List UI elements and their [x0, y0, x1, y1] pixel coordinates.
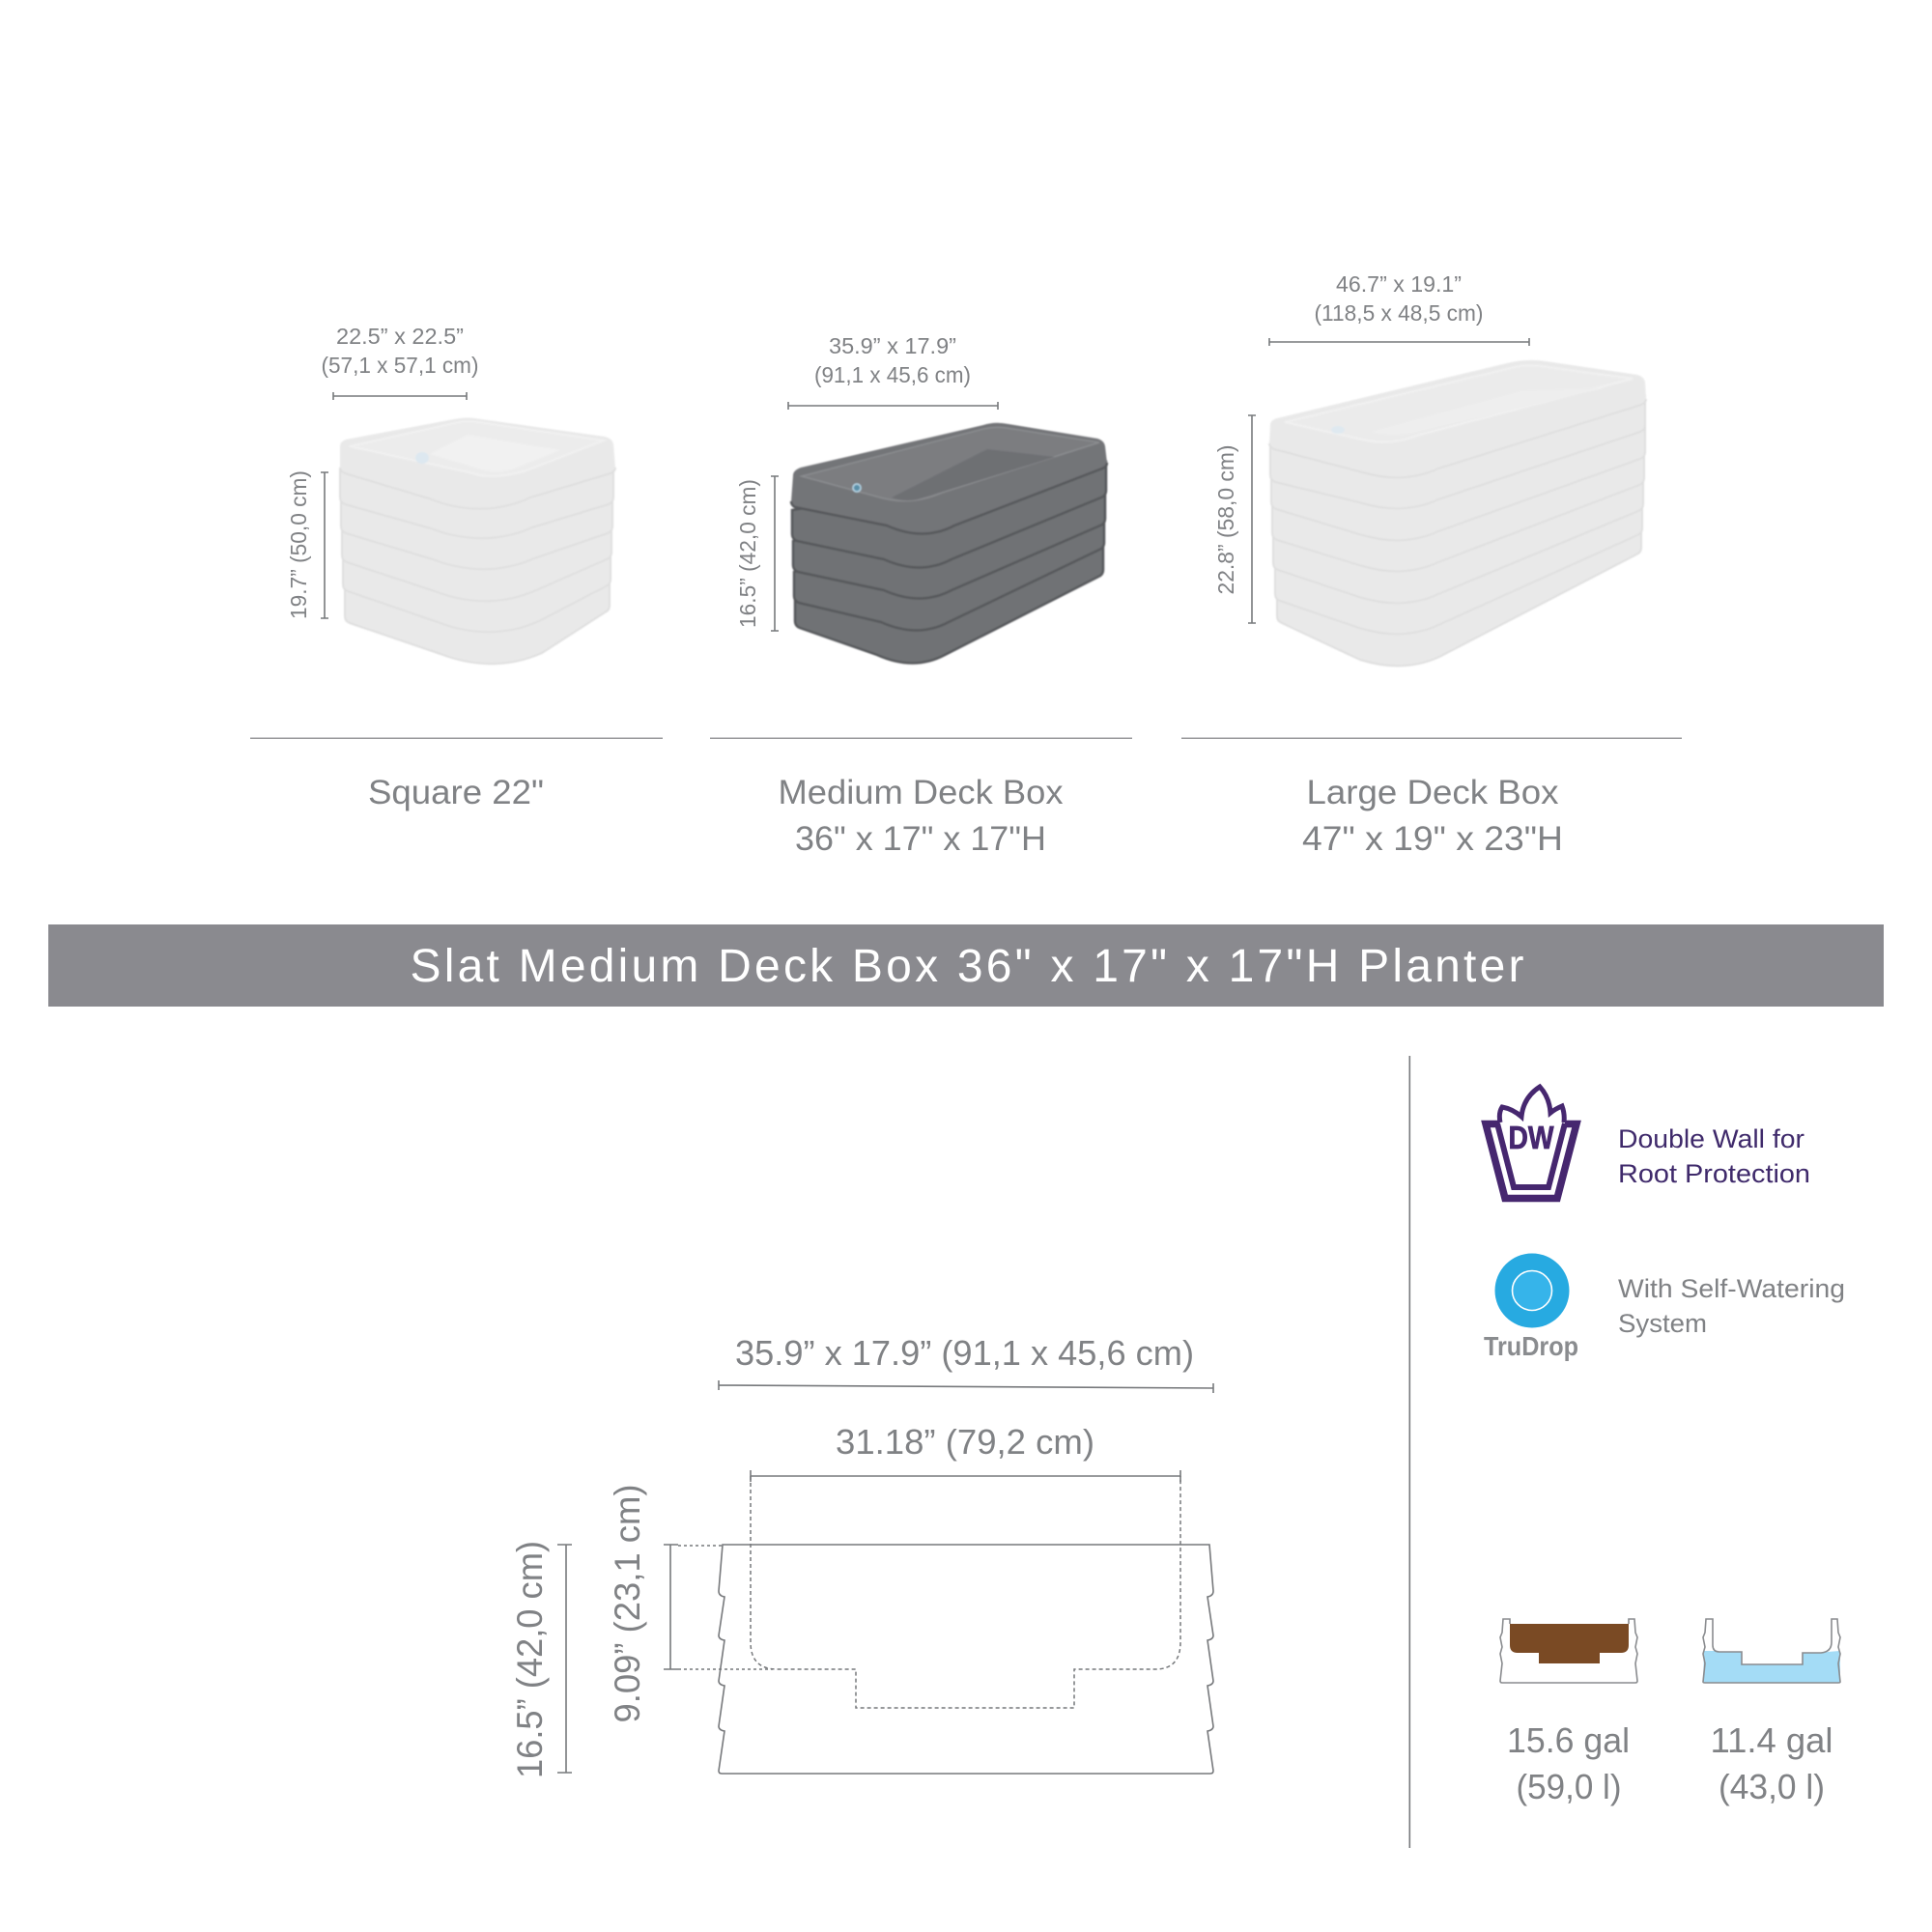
label: large deck box — [1302, 774, 1563, 858]
text: double wall for root protection — [1618, 1124, 1810, 1188]
height dimension: large — [1213, 415, 1256, 623]
text: soil gallons: 15.6 gal — [1507, 1720, 1630, 1760]
width dimension: medium: 35.9” x 17.9” — [829, 333, 956, 358]
panel: large deck box planter — [1181, 271, 1682, 858]
inner width dimension: 31.18” (79,2 cm) — [836, 1422, 1094, 1462]
width dimension: square: 22.5” x 22.5” — [336, 324, 464, 349]
divider: medium — [710, 738, 1132, 739]
vertical divider — [1408, 1056, 1410, 1848]
height dimension: square: 19.7” (50,0 cm) — [286, 470, 311, 619]
outer width dimension: 35.9” x 17.9” (91,1 x 45,6 cm) — [735, 1333, 1194, 1373]
total height dimension — [510, 1541, 572, 1778]
label: large deck box: 47" x 19" x 23"H — [1302, 820, 1563, 858]
width dimension: square — [321, 324, 479, 400]
feature: self-watering — [1484, 1254, 1845, 1361]
height dimension: medium — [735, 476, 779, 631]
text: soil gallons: (59,0 l) — [1517, 1767, 1621, 1806]
text: water gallons: (43,0 l) — [1719, 1767, 1825, 1806]
soil depth dimension: 9.09” (23,1 cm) — [608, 1484, 647, 1723]
text: soil gallons — [1507, 1720, 1630, 1806]
text: with self-watering system — [1618, 1274, 1845, 1338]
icon: TruDrop: TruDrop — [1484, 1331, 1578, 1361]
icon: TruDrop — [1484, 1254, 1578, 1361]
panel: square 22 planter — [250, 324, 663, 811]
label: medium deck box — [779, 774, 1064, 858]
width dimension: medium — [788, 333, 998, 410]
diagram: water fill — [1703, 1619, 1840, 1683]
height dimension: square — [286, 470, 328, 619]
divider: large — [1181, 738, 1682, 739]
total height dimension: 16.5” (42,0 cm) — [510, 1541, 550, 1778]
width dimension: large: (118,5 x 48,5 cm) — [1314, 300, 1484, 326]
panel: cross-section dimension drawing — [510, 1333, 1213, 1778]
width dimension: square: (57,1 x 57,1 cm) — [321, 353, 479, 378]
capacity: water volume — [1703, 1619, 1840, 1806]
text: water gallons — [1710, 1720, 1833, 1806]
inner width dimension — [751, 1422, 1180, 1482]
capacity: soil volume — [1500, 1619, 1637, 1806]
height dimension: medium: 16.5” (42,0 cm) — [735, 479, 760, 628]
text: with self-watering system: System — [1618, 1309, 1707, 1338]
text: double wall for root protection: Double Wall for — [1618, 1124, 1804, 1153]
text: double wall for root protection: Root Protection — [1618, 1159, 1810, 1188]
planter image: medium, dark — [791, 423, 1107, 663]
diagram: soil fill — [1500, 1619, 1637, 1683]
planter image: square, light — [340, 417, 615, 664]
panel: medium deck box planter — [710, 333, 1132, 858]
label: square 22: Square 22" — [368, 774, 544, 811]
icon: double wall pot with leaves — [1486, 1087, 1577, 1198]
title banner: Slat Medium Deck Box 36" x 17" x 17"H Planter — [410, 941, 1524, 992]
outer width dimension — [719, 1333, 1213, 1393]
width dimension: large — [1269, 271, 1529, 346]
text: water gallons: 11.4 gal — [1710, 1720, 1833, 1760]
inner reservoir dashed outline — [751, 1476, 1180, 1708]
width dimension: large: 46.7” x 19.1” — [1336, 271, 1462, 297]
width dimension: medium: (91,1 x 45,6 cm) — [814, 362, 971, 387]
label: medium deck box: Medium Deck Box — [779, 774, 1064, 811]
text: with self-watering system: With Self-Watering — [1618, 1274, 1845, 1303]
title banner — [48, 924, 1884, 1007]
label: medium deck box: 36" x 17" x 17"H — [795, 820, 1046, 858]
planter image: large, light — [1269, 360, 1646, 666]
planter outer outline — [719, 1545, 1213, 1774]
icon: double wall pot with leaves: DW — [1509, 1120, 1554, 1155]
feature: double wall — [1486, 1087, 1810, 1198]
divider: square — [250, 738, 663, 739]
height dimension: large: 22.8” (58,0 cm) — [1213, 444, 1238, 595]
soil depth dimension — [608, 1484, 773, 1723]
label: large deck box: Large Deck Box — [1306, 774, 1559, 811]
